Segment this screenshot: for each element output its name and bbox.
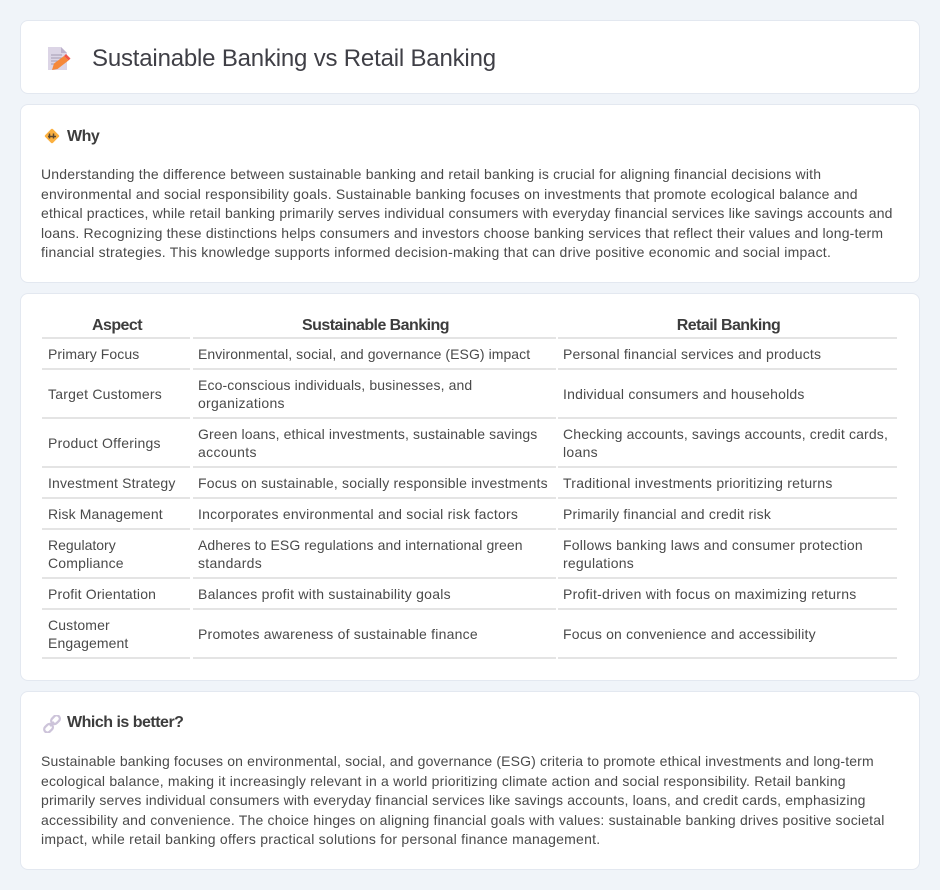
table rows: regulations [563,555,634,571]
text block: why paragraph: loans. Recognizing these distinctions helps consumers and investors choose banking services that reflect their values and long-term [41,225,883,241]
table rows: Environmental, social, and governance (ESG) impact [198,346,530,362]
table header: Retail Banking [677,317,780,334]
table rows: Primarily financial and credit risk [563,506,771,522]
table rows: Investment Strategy [48,475,176,491]
table header [92,317,780,334]
table header: Aspect [92,317,142,334]
panel: why [20,104,920,283]
table rows: Personal financial services and products [563,346,821,362]
panel: comparison table [20,293,920,681]
text block: which is better paragraph: primarily serves individual consumers with everyday financial services like savings accounts, loans, and credit cards, emphasizing [41,792,866,808]
table rows: Customer [48,617,110,633]
table rows: Product Offerings [48,435,161,451]
table rows: Eco-conscious individuals, businesses, and [198,377,472,393]
table rows: Compliance [48,555,124,571]
icon: link [43,715,61,733]
text block: which is better paragraph [41,753,885,847]
panel: which is better [20,691,920,870]
table rows: accounts [198,444,257,460]
icon: diamond sign [44,128,60,144]
text block: which is better paragraph: ecological balance, making it increasingly relevant in a world prioritizing climate action and social responsibility. Retail banking [41,773,846,789]
table rows: Primary Focus [48,346,139,362]
table rows: Promotes awareness of sustainable finance [198,626,478,642]
table header: Sustainable Banking [302,317,449,334]
heading: why: Why [67,128,99,145]
text block: why paragraph: financial strategies. This knowledge supports informed decision-making that can drive positive economic and social impact. [41,244,831,260]
table rows: organizations [198,395,285,411]
table rows: Target Customers [48,386,162,402]
text block: which is better paragraph: impact, while retail banking offers practical solutions for personal finance management. [41,831,600,847]
table rows: Balances profit with sustainability goals [198,586,451,602]
panel: title header [20,20,920,94]
text block: why paragraph [41,166,893,260]
text block: why paragraph: Understanding the difference between sustainable banking and retail banking is crucial for aligning financial decisions with [41,166,821,182]
table rows: Adheres to ESG regulations and international green [198,537,523,553]
table rows: Individual consumers and households [563,386,805,402]
table rows: Profit-driven with focus on maximizing returns [563,586,856,602]
table rows: Incorporates environmental and social risk factors [198,506,518,522]
text block: which is better paragraph: accessibility and convenience. The choice hinges on aligning financial goals with values: sustainable banking drives positive societal [41,812,885,828]
text block: why paragraph: environmental and social responsibility goals. Sustainable banking focuses on investments that promote ecological balance and [41,186,858,202]
table rows [42,337,897,659]
table rows: Focus on sustainable, socially responsible investments [198,475,548,491]
table rows: Checking accounts, savings accounts, credit cards, [563,426,888,442]
table rows: Profit Orientation [48,586,156,602]
icon: document with pencil [48,47,70,70]
table rows: standards [198,555,262,571]
table rows: Risk Management [48,506,163,522]
table rows: Green loans, ethical investments, sustainable savings [198,426,537,442]
title: Sustainable Banking vs Retail Banking [92,45,496,72]
table rows: Focus on convenience and accessibility [563,626,816,642]
table rows: Traditional investments prioritizing returns [563,475,833,491]
table rows: Follows banking laws and consumer protection [563,537,863,553]
table rows: Engagement [48,635,128,651]
table rows: loans [563,444,598,460]
table rows: Regulatory [48,537,116,553]
heading: which is better: Which is better? [67,714,183,731]
text block: which is better paragraph: Sustainable banking focuses on environmental, social, and governance (ESG) criteria to promote ethical investments and long-term [41,753,874,769]
text block: why paragraph: ethical practices, while retail banking primarily serves individual consumers with everyday financial services like savings accounts and [41,205,893,221]
